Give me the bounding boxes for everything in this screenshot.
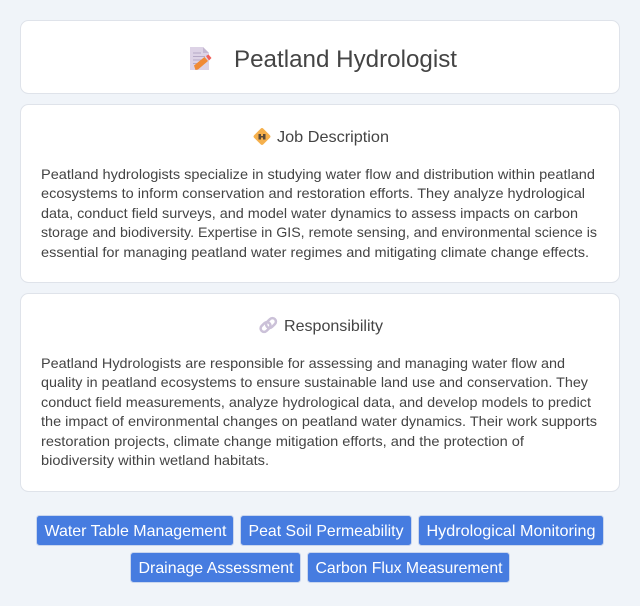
title: Peatland Hydrologist bbox=[234, 46, 457, 73]
tag: hydrological monitoring bbox=[418, 516, 604, 546]
text block: job description: ecosystems to inform conservation and restoration efforts. They analyze hydrological bbox=[41, 185, 585, 201]
tag: carbon flux measurement: Carbon Flux Measurement bbox=[316, 560, 503, 577]
text block: responsibility: the impact of environmental changes on peatland water dynamics. Their work supports bbox=[41, 413, 597, 429]
text block: responsibility: biodiversity within wetland habitats. bbox=[41, 452, 269, 468]
text block: responsibility: Peatland Hydrologists are responsible for assessing and managing water flow and bbox=[41, 355, 565, 371]
text block: responsibility: restoration projects, climate change mitigation efforts, and the protection of bbox=[41, 433, 524, 449]
heading: job description: Job Description bbox=[277, 129, 389, 146]
panel: job description bbox=[20, 104, 620, 282]
tag: drainage assessment bbox=[130, 552, 300, 582]
tags bbox=[36, 516, 604, 582]
icon: diamond sign bbox=[253, 127, 271, 146]
text block: responsibility: quality in peatland ecosystems to ensure sustainable land use and conservation. They bbox=[41, 374, 588, 390]
text block: job description bbox=[41, 166, 597, 260]
tag: hydrological monitoring: Hydrological Monitoring bbox=[426, 523, 596, 540]
tag: drainage assessment: Drainage Assessment bbox=[138, 560, 294, 577]
text block: job description: data, conduct field surveys, and model water dynamics to assess impacts on carbon bbox=[41, 205, 578, 221]
text block: responsibility bbox=[41, 355, 597, 468]
tag: water table management bbox=[36, 516, 234, 546]
panel: title card bbox=[20, 20, 620, 94]
text block: job description: storage and biodiversity. Expertise in GIS, remote sensing, and environmental science is bbox=[41, 224, 597, 240]
heading: responsibility: Responsibility bbox=[284, 318, 383, 335]
tag: peat soil permeability bbox=[240, 516, 412, 546]
icon: document with pencil bbox=[190, 47, 212, 70]
text block: responsibility: conduct field measurements, analyze hydrological data, and develop models to predict bbox=[41, 394, 591, 410]
tag: peat soil permeability: Peat Soil Permeability bbox=[248, 523, 404, 540]
tag: water table management: Water Table Management bbox=[44, 523, 227, 540]
panel: responsibility bbox=[20, 294, 620, 492]
tag: carbon flux measurement bbox=[308, 552, 510, 582]
icon: chain link bbox=[259, 317, 277, 333]
text block: job description: Peatland hydrologists specialize in studying water flow and distribution within peatland bbox=[41, 166, 595, 182]
text block: job description: essential for managing peatland water regimes and mitigating climate change effects. bbox=[41, 244, 589, 260]
